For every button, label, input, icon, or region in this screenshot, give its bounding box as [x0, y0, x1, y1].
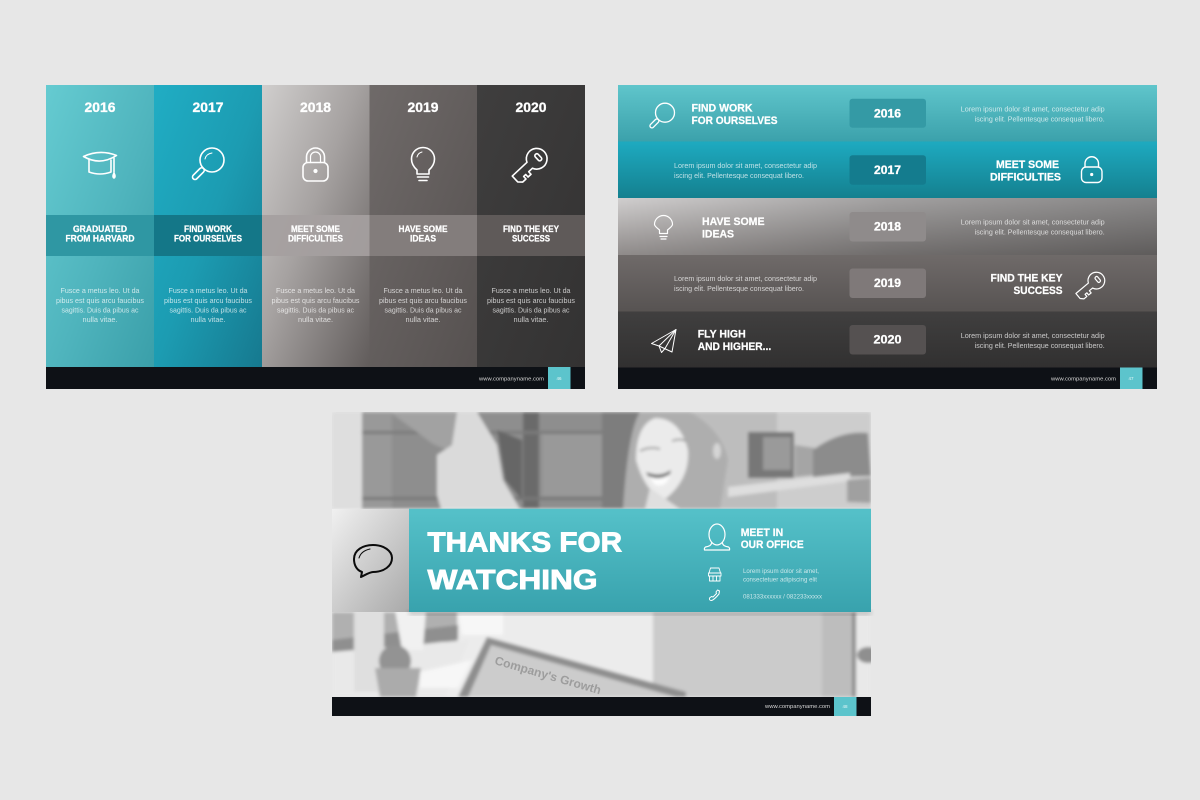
body text 2018: sagittis. Duis da pibus ac	[277, 306, 354, 314]
body text 2020: pibus est quis arcu faucibus	[487, 296, 575, 305]
body text 2017: sagittis. Duis da pibus ac	[170, 306, 247, 314]
footer bar slide 46: 46	[556, 376, 562, 381]
body text 2018	[272, 286, 360, 324]
label: graduated from harvard: GRADUATED	[73, 224, 127, 234]
row 2018	[618, 198, 1157, 255]
icon: key	[508, 144, 551, 187]
heading: find work for ourselves: FOR OURSELVES	[692, 115, 778, 127]
body text	[961, 331, 1105, 350]
label: find the key success	[503, 224, 559, 244]
tablet caption in photo: Company's Growth	[493, 653, 603, 697]
icon: store	[708, 568, 721, 581]
footer bar slide 46: www.companyname.com	[478, 376, 544, 382]
label: graduated from harvard: FROM HARVARD	[66, 234, 135, 244]
footer bar slide 48: 48	[842, 704, 848, 709]
icon: graduation cap	[84, 152, 116, 178]
heading: fly high and higher: AND HIGHER...	[698, 341, 771, 353]
year pill 2019: 2019	[874, 276, 901, 290]
label: find work for ourselves: FOR OURSELVES	[174, 234, 242, 244]
icon: padlock	[303, 148, 328, 181]
body text 2016: pibus est quis arcu faucibus	[56, 296, 144, 305]
year pill 2017: 2017	[874, 163, 901, 177]
body text: iscing elit. Pellentesque consequat libero.	[975, 114, 1105, 124]
year 2018: 2018	[300, 99, 331, 115]
icon: key	[1073, 269, 1108, 302]
body text: Lorem ipsum dolor sit amet, consectetur adip	[961, 218, 1105, 227]
body text: Lorem ipsum dolor sit amet, consectetur adip	[674, 161, 817, 170]
body text 2017: pibus est quis arcu faucibus	[164, 296, 252, 305]
year 2017: 2017	[192, 99, 224, 115]
footer bar slide 48	[332, 697, 871, 716]
heading: meet some difficulties: MEET SOME	[996, 159, 1059, 171]
year pill 2018	[850, 212, 926, 242]
row 2019	[618, 255, 1157, 312]
body text 2017: nulla vitae.	[190, 315, 226, 324]
year 2020: 2020	[516, 99, 547, 115]
body text	[674, 161, 817, 180]
footer bar slide 46	[46, 367, 585, 389]
label: meet some difficulties: DIFFICULTIES	[288, 234, 343, 244]
label: have some ideas: HAVE SOME	[398, 224, 448, 234]
column 2016	[46, 85, 154, 367]
body text: Lorem ipsum dolor sit amet, consectetur adip	[961, 331, 1105, 340]
address text	[743, 569, 819, 584]
icon: padlock	[1082, 157, 1102, 182]
body text: iscing elit. Pellentesque consequat libero.	[975, 228, 1105, 237]
icon: magnifier	[649, 103, 674, 129]
heading: fly high and higher: FLY HIGH	[698, 329, 746, 341]
body text: iscing elit. Pellentesque consequat libero.	[674, 284, 804, 293]
label: meet some difficulties	[288, 224, 343, 244]
phone numbers: 081333xxxxxx / 082233xxxxx	[743, 594, 822, 600]
body text 2019	[379, 286, 467, 324]
row 2016	[618, 85, 1157, 142]
body text 2016: nulla vitae.	[82, 315, 118, 324]
footer bar slide 47	[618, 368, 1157, 389]
body text 2016: Fusce a metus leo. Ut da	[60, 286, 140, 295]
heading: have some ideas: IDEAS	[702, 228, 734, 240]
slide: vertical year timeline	[46, 85, 585, 389]
icon: phone	[709, 590, 720, 600]
title	[428, 527, 622, 595]
icon: light bulb	[412, 148, 434, 180]
label: find the key success: FIND THE KEY	[503, 224, 559, 234]
body text	[961, 218, 1105, 237]
heading: fly high and higher	[698, 329, 771, 353]
address text: consectetuer adipiscing elit	[743, 578, 817, 584]
year pill 2018: 2018	[874, 220, 901, 234]
footer bar slide 48: www.companyname.com	[764, 704, 830, 710]
year pill 2019	[850, 268, 926, 298]
heading: have some ideas	[702, 216, 764, 240]
footer bar slide 47: www.companyname.com	[1050, 376, 1116, 382]
year 2019: 2019	[408, 99, 439, 115]
column 2019	[370, 85, 477, 367]
year pill 2020	[850, 325, 926, 354]
heading: find work for ourselves: FIND WORK	[692, 103, 753, 115]
label: meet some difficulties: MEET SOME	[291, 224, 340, 234]
row 2017	[618, 142, 1157, 198]
greyscale office photo	[332, 412, 879, 697]
body text 2019: nulla vitae.	[406, 315, 440, 324]
heading: find work for ourselves	[692, 103, 778, 127]
label: find the key success: SUCCESS	[512, 234, 550, 244]
drop shadow under band	[409, 610, 871, 615]
label: graduated from harvard	[66, 224, 135, 244]
body text 2018: pibus est quis arcu faucibus	[272, 296, 360, 305]
body text 2019: Fusce a metus leo. Ut da	[384, 286, 462, 295]
body text 2017	[164, 286, 252, 324]
body text 2019: sagittis. Duis da pibus ac	[384, 306, 462, 314]
body text: iscing elit. Pellentesque consequat libero.	[975, 341, 1105, 350]
row 2020	[618, 312, 1157, 368]
slide: horizontal year timeline	[618, 85, 1157, 389]
address text: Lorem ipsum dolor sit amet,	[743, 569, 819, 575]
year pill 2016	[850, 99, 926, 128]
body text 2016: sagittis. Duis da pibus ac	[62, 306, 139, 314]
column 2017	[154, 85, 262, 367]
body text 2019: pibus est quis arcu faucibus	[379, 296, 467, 305]
icon: magnifier	[191, 148, 224, 181]
heading: meet some difficulties	[990, 159, 1061, 184]
body text 2020: nulla vitae.	[514, 315, 548, 324]
title: WATCHING	[428, 564, 598, 595]
column 2020	[477, 85, 585, 367]
heading: meet some difficulties: DIFFICULTIES	[990, 172, 1061, 184]
icon: person	[704, 524, 730, 550]
panel: teal band	[409, 509, 871, 612]
heading: have some ideas: HAVE SOME	[702, 216, 764, 228]
heading: find the key success: SUCCESS	[1014, 285, 1062, 297]
title: THANKS FOR	[428, 527, 622, 558]
heading: meet in our office	[741, 527, 804, 551]
body text 2018: Fusce a metus leo. Ut da	[276, 286, 355, 295]
slide: thanks for watching	[332, 412, 879, 716]
year pill 2016: 2016	[874, 106, 901, 120]
year pill 2020: 2020	[874, 333, 902, 347]
body text 2016	[56, 286, 144, 324]
footer bar slide 47: 47	[1128, 376, 1134, 381]
body text	[674, 274, 817, 293]
body text 2020: Fusce a metus leo. Ut da	[492, 286, 570, 295]
icon: light bulb	[654, 216, 672, 239]
icon: paper plane	[652, 330, 676, 352]
year pill 2017	[850, 155, 926, 185]
body text 2018: nulla vitae.	[298, 315, 333, 324]
label: have some ideas: IDEAS	[410, 234, 436, 244]
label: find work for ourselves	[174, 224, 242, 244]
body text 2020: sagittis. Duis da pibus ac	[492, 306, 570, 314]
label: find work for ourselves: FIND WORK	[184, 224, 232, 234]
body text: Lorem ipsum dolor sit amet, consectetur adip	[674, 274, 817, 283]
column 2018	[262, 85, 370, 367]
heading: meet in our office: OUR OFFICE	[741, 539, 804, 551]
label: have some ideas	[398, 224, 448, 244]
body text: Lorem ipsum dolor sit amet, consectetur adip	[961, 104, 1105, 114]
year 2016: 2016	[84, 99, 116, 115]
heading: find the key success: FIND THE KEY	[990, 273, 1063, 285]
body text: iscing elit. Pellentesque consequat libero.	[674, 171, 804, 180]
heading: meet in our office: MEET IN	[741, 527, 783, 539]
icon square: speech bubble	[332, 509, 409, 612]
heading: find the key success	[990, 273, 1063, 297]
body text 2020	[487, 286, 575, 324]
body text	[961, 104, 1105, 124]
body text 2017: Fusce a metus leo. Ut da	[168, 286, 248, 295]
